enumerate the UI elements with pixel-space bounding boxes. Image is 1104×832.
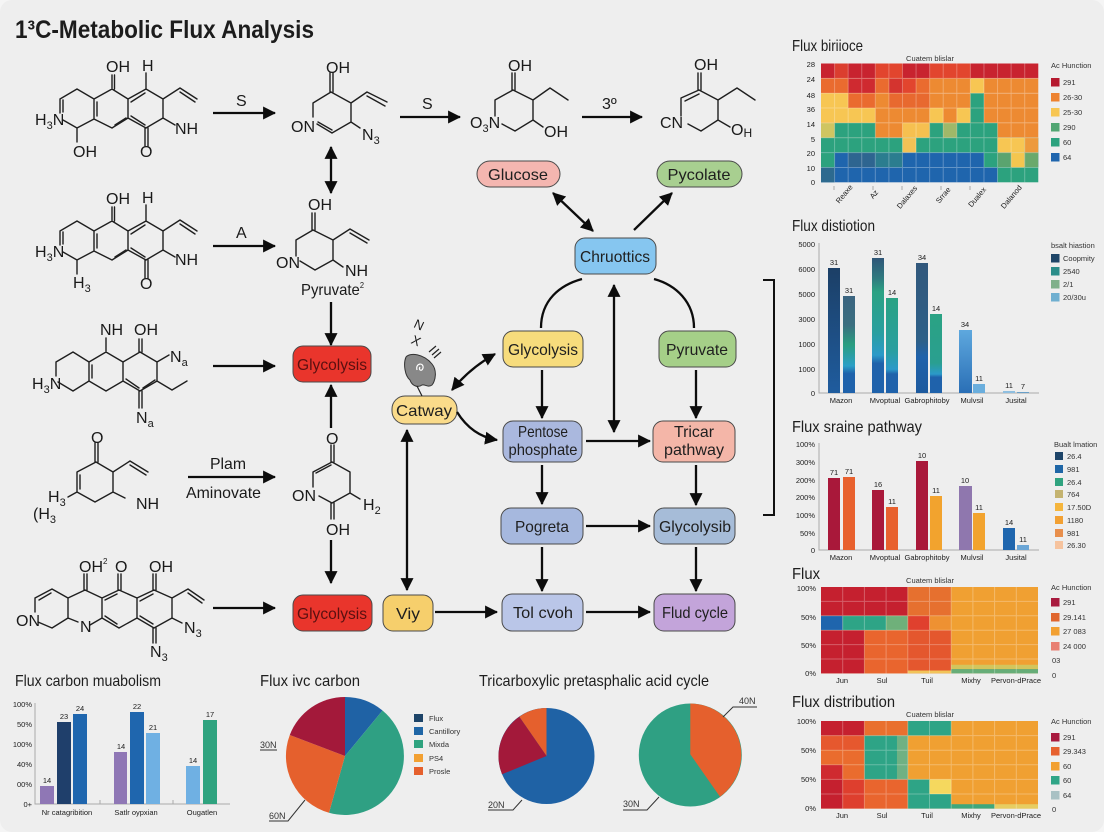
molecule: left row 5: O (115, 559, 127, 576)
panel: Flux heatmap: Jun (836, 676, 848, 685)
node: Glycolysis yellow (503, 331, 583, 367)
molecule: left row 5: 3 (196, 628, 202, 640)
molecule: lower middle (292, 431, 381, 539)
molecule: left row 2: NH (175, 252, 198, 269)
panel: Flux sraine pathway bar chart: Mazon (830, 553, 852, 562)
arrow labels: Aminovate (186, 485, 261, 502)
heading: Flux distiotion: Flux distiotion (792, 218, 875, 235)
molecule: left row 4: O (91, 430, 103, 447)
panel: Flux distiotion bar chart: 2540 (1063, 267, 1080, 276)
molecule: top right D: O (731, 122, 743, 139)
panel: Flux biriioce heatmap: Cuatem blislar (906, 54, 954, 63)
panel: Flux sraine pathway bar chart: Mvoptual (870, 553, 901, 562)
panel: Flux distiotion bar chart: Gabrophitoby (904, 396, 950, 405)
node: Tol cvoh: Tol cvoh (513, 605, 573, 622)
molecule: top centre C: 3 (482, 123, 489, 135)
panel: Tricarboxylic pies: 40N (739, 696, 756, 706)
molecule: pyruvate (276, 197, 369, 299)
node: Glycolysis red upper (293, 346, 371, 382)
node: Glycolysis red upper: Glycolysis (297, 357, 367, 374)
panel: Flux distiotion bar chart: Coopmity (1063, 254, 1095, 263)
panel: Flux carbon muabolism bar chart: 00% (17, 780, 32, 789)
molecule: left row 4 (33, 430, 159, 526)
molecule: left row 5: 3 (162, 652, 168, 664)
molecule: top right D: OH (694, 57, 718, 74)
panel: Flux biriioce heatmap: 20 (807, 149, 815, 158)
panel: Flux carbon muabolism bar chart: 24 (76, 704, 84, 713)
molecule: left row 3: a (148, 418, 155, 430)
panel: Flux distribution heatmap: 0 (1052, 805, 1056, 814)
panel: Flux ivc carbon pie (260, 673, 461, 821)
panel: Flux heatmap: 03 (1052, 656, 1060, 665)
arrow labels (186, 93, 617, 502)
panel: Flux biriioce heatmap: Srrae (934, 185, 953, 205)
molecule: left row 3: OH (134, 322, 158, 339)
panel: Flux distiotion bar chart: 7 (1021, 382, 1025, 391)
panel: Flux distribution heatmap: 60 (1063, 776, 1071, 785)
molecule: left row 2: H (35, 244, 47, 261)
panel: Flux biriioce heatmap: 5 (811, 135, 815, 144)
molecule: lower middle: H (363, 497, 375, 514)
molecule: left row 3: a (182, 357, 189, 369)
panel: Flux distiotion bar chart: Mazon (830, 396, 852, 405)
panel: Flux ivc carbon pie: 30N (260, 740, 277, 750)
node: Catway (392, 396, 457, 424)
panel: Tricarboxylic pies: 20N (488, 800, 505, 810)
panel: Flux distribution heatmap: Ac Hunction (1051, 717, 1091, 726)
molecule: left row 2: OH (106, 191, 130, 208)
panel: Flux sraine pathway bar chart: 26.4 (1067, 452, 1082, 461)
panel: Flux biriioce heatmap: 291 (1063, 78, 1076, 87)
molecule: top centre A: ON (291, 119, 315, 136)
panel: Flux sraine pathway bar chart: 11 (932, 486, 940, 495)
panel: Flux distribution heatmap: Jun (836, 811, 848, 820)
heading: Flux: Flux (792, 566, 820, 583)
molecule: top centre C: N (489, 115, 500, 132)
panel: Flux carbon muabolism bar chart: 22 (133, 702, 141, 711)
panel: Flux distribution heatmap: 64 (1063, 791, 1071, 800)
panel: Flux biriioce heatmap: 0 (811, 178, 815, 187)
molecule: top left row 1: N (53, 112, 64, 129)
node: Tricar pathway (653, 421, 735, 462)
arrows: centre network (407, 193, 696, 612)
molecule: top centre A (291, 60, 387, 147)
molecule: left row 5: N (80, 619, 92, 636)
molecule: left row 5 (16, 557, 204, 664)
molecule: top left row 1: 3 (47, 120, 53, 132)
panel: Flux sraine pathway bar chart: 26.4 (1067, 478, 1082, 487)
panel: Flux distribution heatmap: Tuil (921, 811, 933, 820)
node: Pogreta: Pogreta (515, 519, 569, 536)
icon: grey enzyme with marks: N (412, 316, 427, 334)
molecule: top centre C (470, 58, 568, 141)
panel: Flux distribution heatmap: Cuatem blislar (906, 710, 954, 719)
panel: Flux distiotion bar chart: 0 (811, 389, 815, 398)
panel: Flux sraine pathway bar chart: 26.30 (1067, 541, 1086, 550)
panel: Flux carbon muabolism bar chart (13, 673, 230, 817)
panel: Flux distribution heatmap: 0% (805, 804, 816, 813)
molecule: left row 3: H (32, 376, 44, 393)
panel: Flux sraine pathway bar chart: Gabrophitoby (904, 553, 950, 562)
panel: Flux carbon muabolism bar chart: 100% (13, 700, 32, 709)
panel: Flux distiotion bar chart: Mvoptual (870, 396, 901, 405)
node: Glucose (477, 161, 560, 187)
molecule: left row 4: (H (33, 506, 50, 523)
panel: Flux carbon muabolism bar chart: 14 (117, 742, 125, 751)
panel: Flux distiotion bar chart: 14 (888, 288, 896, 297)
panel: Flux carbon muabolism bar chart: 14 (189, 756, 197, 765)
panel: Flux sraine pathway bar chart: 16 (874, 480, 882, 489)
panel: Flux sraine pathway bar chart: 11 (888, 497, 896, 506)
panel: Flux carbon muabolism bar chart: 21 (149, 723, 157, 732)
arrow labels: Plam (210, 456, 246, 473)
molecule: left row 2 (35, 190, 198, 295)
panel: Flux distiotion bar chart: 1000 (798, 365, 815, 374)
panel: Flux sraine pathway bar chart: 981 (1067, 465, 1080, 474)
panel: Flux distribution heatmap (792, 694, 1091, 820)
panel: Flux distiotion bar chart: 5000 (798, 290, 815, 299)
panel: Flux distribution heatmap: Mixhy (961, 811, 981, 820)
panel: Flux sraine pathway bar chart: Mulvsil (961, 553, 984, 562)
panel: Flux distribution heatmap: 60 (1063, 762, 1071, 771)
heading: Flux sraine pathway: Flux sraine pathway (792, 419, 922, 436)
panel: Flux carbon muabolism bar chart: Nr catagribition (42, 808, 92, 817)
panel: Flux sraine pathway bar chart: 764 (1067, 490, 1080, 499)
panel: Flux biriioce heatmap: 60 (1063, 138, 1071, 147)
panel: Flux heatmap: Cuatem blislar (906, 576, 954, 585)
panel: Flux sraine pathway bar chart: 50% (800, 529, 815, 538)
molecule: top centre C: OH (508, 58, 532, 75)
molecule: top right D: CN (660, 115, 683, 132)
icon: grey enzyme with marks (405, 316, 441, 396)
molecule: left row 3 (32, 322, 189, 430)
panel: Flux biriioce heatmap: Dalaxes (895, 184, 919, 210)
panel: Flux heatmap: Pervon-dPrace (991, 676, 1041, 685)
panel: Flux sraine pathway bar chart: 71 (830, 468, 838, 477)
panel: Flux sraine pathway bar chart: 71 (845, 467, 853, 476)
molecule: top left row 1: NH (175, 121, 198, 138)
panel: Flux biriioce heatmap: Dalanod (999, 183, 1024, 210)
arrow labels: A (236, 225, 247, 242)
node: Tol cvoh (502, 594, 583, 631)
node: Flud cycle: Flud cycle (662, 605, 728, 622)
panel: Flux carbon muabolism bar chart: 0+ (23, 800, 33, 809)
molecule: top centre C: OH (544, 124, 568, 141)
panel: Flux sraine pathway bar chart: Jusital (1005, 553, 1027, 562)
molecule: top left row 1: OH (73, 144, 97, 161)
molecule: left row 2: N (53, 244, 64, 261)
node: Pycolate (657, 161, 742, 187)
molecule: pyruvate: ON (276, 255, 300, 272)
node: Glycolysis red lower: Glycolysis (297, 606, 367, 623)
panel: Flux heatmap: 27 083 (1063, 627, 1086, 636)
molecule: pyruvate: OH (308, 197, 332, 214)
molecule: pyruvate: NH (345, 263, 368, 280)
panel: Flux biriioce heatmap (792, 38, 1091, 210)
panel: Flux heatmap: 24 000 (1063, 642, 1086, 651)
panel: Flux biriioce heatmap: 28 (807, 60, 815, 69)
molecule: top left row 1 (35, 58, 198, 161)
molecule: top centre A: N (362, 127, 374, 144)
panel: Flux distiotion bar chart: 34 (961, 320, 969, 329)
panel: Flux ivc carbon pie: PS4 (429, 754, 443, 763)
panel: Flux carbon muabolism bar chart: 14 (43, 776, 51, 785)
panel: Flux ivc carbon pie: Prosle (429, 767, 450, 776)
panel: Flux distiotion bar chart: 31 (830, 258, 838, 267)
panel: Flux sraine pathway bar chart: 100% (796, 440, 815, 449)
node: Tricar pathway: Tricar (674, 424, 715, 441)
panel: Flux biriioce heatmap: 64 (1063, 153, 1071, 162)
panel: Flux biriioce heatmap: 290 (1063, 123, 1076, 132)
panel: Flux sraine pathway bar chart: 981 (1067, 529, 1080, 538)
molecule: left row 3: 3 (44, 384, 50, 396)
panel: Flux distiotion bar chart: 1000 (798, 340, 815, 349)
heading: Flux biriioce: Flux biriioce (792, 38, 863, 55)
node: Flud cycle (654, 594, 735, 631)
node: Pentose phosphate (503, 421, 582, 462)
title: 1³C-Metabolic Flux Analysis (15, 16, 314, 44)
panel: Flux carbon muabolism bar chart: 50% (17, 720, 32, 729)
panel: Tricarboxylic pies: 30N (623, 799, 640, 809)
icon: grey enzyme with marks: X (409, 332, 423, 349)
panel: Flux sraine pathway bar chart: 200% (796, 476, 815, 485)
node: Pogreta (501, 508, 583, 544)
panel: Flux distiotion bar chart: 11 (975, 374, 983, 383)
molecule: left row 5: ON (16, 613, 40, 630)
molecule: left row 2: 3 (47, 252, 53, 264)
panel: Flux heatmap: Ac Hunction (1051, 583, 1091, 592)
panel: Flux heatmap: 50% (801, 613, 816, 622)
molecule: top left row 1: O (140, 144, 152, 161)
panel: Flux distiotion bar chart: Mulvsil (961, 396, 984, 405)
heading: Tricarboxylic pretasphalic acid cycle: Tricarboxylic pretasphalic acid cycle (479, 673, 709, 690)
arrow labels: S (236, 93, 247, 110)
node: Tricar pathway: pathway (664, 442, 724, 459)
panel: Flux sraine pathway bar chart: Bualt lmation (1054, 440, 1097, 449)
panel: Flux carbon muabolism bar chart: 23 (60, 712, 68, 721)
panel: Flux distiotion bar chart: 6000 (798, 265, 815, 274)
molecule: left row 2: 3 (85, 283, 91, 295)
molecule: left row 5: N (184, 620, 196, 637)
panel: Flux heatmap (792, 566, 1091, 685)
molecule: left row 4: 3 (60, 497, 66, 509)
bracket (763, 280, 774, 515)
panel: Flux heatmap: 100% (797, 584, 816, 593)
panel: Flux sraine pathway bar chart: 0 (811, 546, 815, 555)
panel: Flux distribution heatmap: 29.343 (1063, 747, 1086, 756)
molecule: left row 4: 3 (50, 514, 56, 526)
molecule: pyruvate: 2 (360, 281, 365, 290)
heading: Flux ivc carbon: Flux ivc carbon (260, 673, 360, 690)
molecule: lower middle: OH (326, 522, 350, 539)
panel: Flux biriioce heatmap: 25-30 (1063, 108, 1082, 117)
molecule: top right D (660, 57, 755, 140)
panel: Flux distribution heatmap: Pervon-dPrace (991, 811, 1041, 820)
panel: Flux distiotion bar chart: 20/30u (1063, 293, 1086, 302)
panel: Flux distribution heatmap: Sul (877, 811, 888, 820)
panel: Flux distribution heatmap: 50% (801, 746, 816, 755)
panel: Flux biriioce heatmap: 36 (807, 105, 815, 114)
panel: Flux distiotion bar chart: 3000 (798, 315, 815, 324)
panel: Flux sraine pathway bar chart: 100% (796, 511, 815, 520)
molecule: left row 3: N (170, 349, 182, 366)
node: Catway: Catway (396, 403, 452, 420)
panel: Flux distribution heatmap: 100% (797, 717, 816, 726)
molecule: left row 5: OH (79, 559, 103, 576)
panel: Flux distiotion bar chart (792, 218, 1095, 405)
node: Glycolysis red lower (293, 595, 372, 631)
panel: Flux biriioce heatmap: Dualex (966, 185, 988, 209)
panel: Flux heatmap: 50% (801, 641, 816, 650)
node: Chruottics: Chruottics (580, 249, 650, 266)
molecule: left row 2: H (73, 275, 85, 292)
heading: Flux carbon muabolism: Flux carbon muabolism (15, 673, 161, 690)
node: Pyruvate (659, 331, 736, 367)
panel: Flux sraine pathway bar chart: 300% (796, 458, 815, 467)
panel: Flux biriioce heatmap: 24 (807, 75, 815, 84)
panel: Flux distiotion bar chart: 11 (1005, 381, 1013, 390)
panel: Flux heatmap: 291 (1063, 598, 1076, 607)
panel: Flux distiotion bar chart: bsalt hiastion (1051, 241, 1095, 250)
panel: Flux distiotion bar chart: Jusital (1005, 396, 1027, 405)
molecule: top right D: H (743, 126, 752, 140)
panel: Flux distiotion bar chart: 14 (932, 304, 940, 313)
panel: Flux sraine pathway bar chart: 14 (1005, 518, 1013, 527)
molecule: left row 3: N (136, 410, 148, 427)
panel: Flux carbon muabolism bar chart: Ougatlen (187, 808, 217, 817)
molecule: lower middle: 2 (375, 505, 381, 517)
panel: Flux sraine pathway bar chart: 11 (1019, 535, 1027, 544)
panel: Flux distiotion bar chart: 2/1 (1063, 280, 1073, 289)
panel: Flux carbon muabolism bar chart: 40% (17, 760, 32, 769)
panel: Flux sraine pathway bar chart: 10 (918, 451, 926, 460)
molecule: left row 2: H (142, 190, 154, 207)
panel: Flux sraine pathway bar chart: 11 (975, 503, 983, 512)
panel: Flux heatmap: 0 (1052, 671, 1056, 680)
panel: Flux sraine pathway bar chart: 10 (961, 476, 969, 485)
panel: Flux biriioce heatmap: Ac Hunction (1051, 61, 1091, 70)
molecule: lower middle: ON (292, 488, 316, 505)
panel: Flux biriioce heatmap: 10 (807, 164, 815, 173)
panel: Flux heatmap: 29.141 (1063, 613, 1086, 622)
molecule: top centre A: 3 (374, 135, 380, 147)
panel: Tricarboxylic pies (479, 673, 757, 810)
panel: Flux sraine pathway bar chart (792, 419, 1097, 562)
molecule: left row 3: N (50, 376, 61, 393)
molecule: left row 2: O (140, 276, 152, 293)
panel: Flux biriioce heatmap: 48 (807, 91, 815, 100)
panel: Flux heatmap: Sul (877, 676, 888, 685)
panel: Flux carbon muabolism bar chart: 100% (13, 740, 32, 749)
panel: Flux biriioce heatmap: Az (868, 188, 880, 201)
molecule: top left row 1: OH (106, 59, 130, 76)
panel: Flux ivc carbon pie: Mixda (429, 740, 450, 749)
panel: Flux ivc carbon pie: Cantillory (429, 727, 461, 736)
molecule: pyruvate: Pyruvate (301, 282, 364, 299)
molecule: left row 5: 2 (103, 557, 108, 566)
panel: Flux ivc carbon pie: Flux (429, 714, 443, 723)
molecule: top centre A: OH (326, 60, 350, 77)
node: Glycolysib (654, 508, 735, 544)
panel: Flux ivc carbon pie: 60N (269, 811, 286, 821)
node: Pentose phosphate: phosphate (508, 442, 578, 459)
node: Viy (383, 595, 433, 631)
panel: Flux distiotion bar chart: 34 (918, 253, 926, 262)
panel: Flux biriioce heatmap: Reaxe (834, 183, 855, 205)
arrows: left column (188, 113, 642, 608)
molecule: left row 5: OH (149, 559, 173, 576)
panel: Flux sraine pathway bar chart: 200% (796, 493, 815, 502)
molecule: top left row 1: H (35, 112, 47, 129)
panel: Flux sraine pathway bar chart: 17.50D (1067, 503, 1092, 512)
panel: Flux heatmap: 0% (805, 669, 816, 678)
node: Pentose phosphate: Pentose (518, 424, 568, 441)
molecule: left row 4: NH (136, 496, 159, 513)
node: Viy: Viy (396, 606, 420, 623)
panel: Flux carbon muabolism bar chart: 17 (206, 710, 214, 719)
molecule: top left row 1: H (142, 58, 154, 75)
panel: Flux carbon muabolism bar chart: Satlr oypxian (114, 808, 158, 817)
panel: Flux distribution heatmap: 50% (801, 775, 816, 784)
panel: Flux heatmap: Mixhy (961, 676, 981, 685)
panel: Flux distiotion bar chart: 31 (874, 248, 882, 257)
node: Pycolate: Pycolate (668, 167, 731, 184)
panel: Flux sraine pathway bar chart: 1180 (1067, 516, 1083, 525)
panel: Flux biriioce heatmap: 26-30 (1063, 93, 1082, 102)
panel: Flux heatmap: Tuil (921, 676, 933, 685)
node: Glucose: Glucose (488, 167, 548, 184)
heading: Flux distribution: Flux distribution (792, 694, 895, 711)
molecule: lower middle: O (326, 431, 338, 448)
molecule: left row 5: N (150, 644, 162, 661)
node: Pyruvate: Pyruvate (666, 342, 728, 359)
panel: Flux biriioce heatmap: 14 (807, 120, 815, 129)
panel: Flux distiotion bar chart: 31 (845, 286, 853, 295)
panel: Flux distribution heatmap: 291 (1063, 733, 1076, 742)
node: Chruottics (575, 238, 656, 274)
molecule: top centre C: O (470, 115, 482, 132)
arrow labels: 3º (602, 96, 617, 113)
panel: Flux distiotion bar chart: 5000 (798, 240, 815, 249)
node: Glycolysis yellow: Glycolysis (508, 342, 578, 359)
arrow labels: S (422, 96, 433, 113)
node: Glycolysib: Glycolysib (659, 519, 731, 536)
molecule: left row 4: H (48, 489, 60, 506)
molecule: left row 3: NH (100, 322, 123, 339)
